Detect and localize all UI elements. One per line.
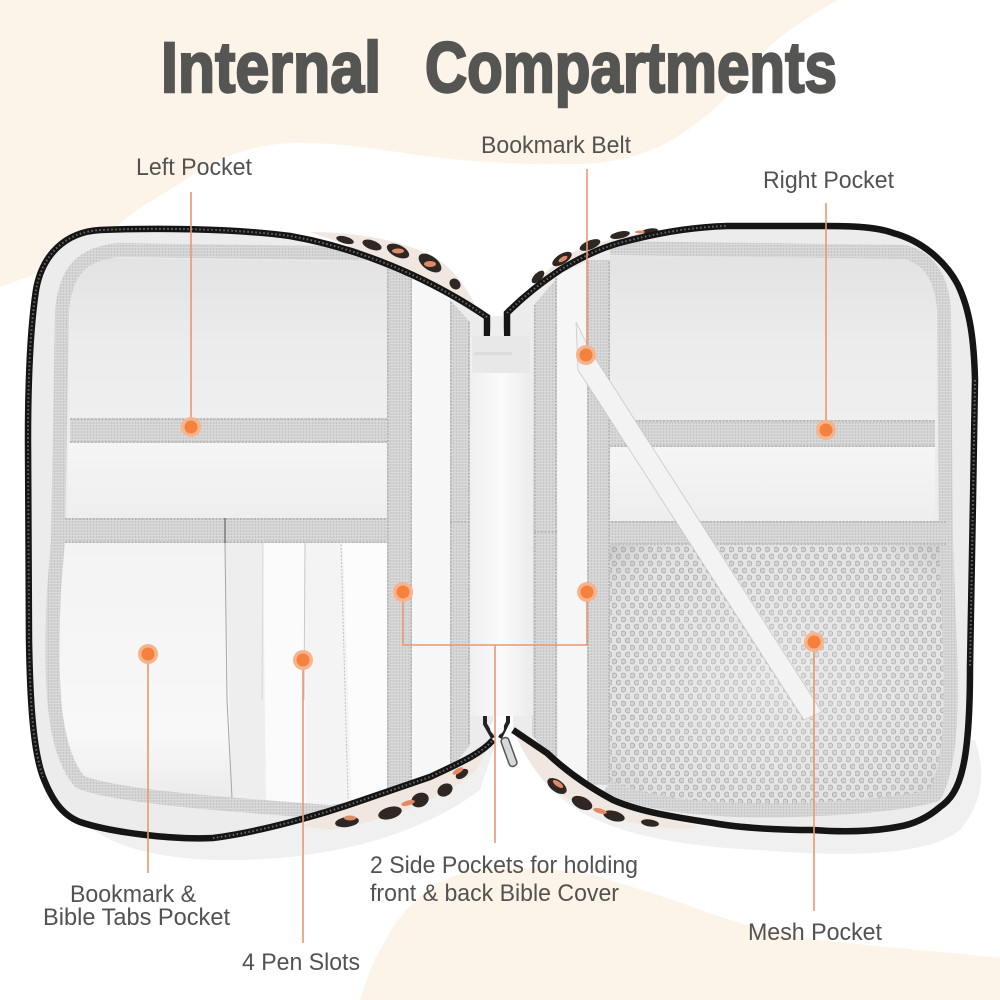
inner rim, left (450, 300, 470, 770)
callout: bookmark and bible tabs pocket (43, 644, 230, 931)
middle fabric, right (610, 447, 935, 522)
zipper, left (28, 229, 493, 838)
leopard fabric band, left bottom (300, 745, 490, 830)
zipper, right (507, 226, 975, 831)
callout: pen slots: 4 Pen Slots (242, 949, 360, 976)
callout: side pockets (370, 582, 638, 907)
leopard fabric band, right top (524, 227, 685, 298)
callout: side pockets: 2 Side Pockets for holding (370, 852, 638, 879)
title: Compartments (425, 29, 837, 108)
callout: mesh pocket (748, 632, 882, 946)
strap, right pocket (607, 420, 935, 447)
rim webbing, left (52, 250, 440, 812)
vertical strap, left (387, 265, 412, 790)
strap, lower pockets (65, 518, 388, 543)
strap, mesh pocket (608, 521, 946, 545)
side pocket, right (557, 262, 587, 782)
lining (503, 226, 975, 831)
callout: side pockets: front & back Bible Cover (370, 880, 619, 907)
bottom zipper pull (485, 716, 518, 767)
title: Internal (161, 29, 381, 108)
left panel of case (28, 229, 495, 840)
leopard fabric band, left top (310, 232, 478, 312)
vertical strap, right (587, 260, 610, 785)
callout: left pocket: Left Pocket (136, 154, 252, 181)
top zipper head (490, 316, 504, 336)
callout: right pocket: Right Pocket (763, 167, 894, 194)
side pocket, left (412, 268, 450, 786)
callout: bookmark and bible tabs pocket: Bookmark & (70, 881, 196, 908)
right panel of case (503, 226, 975, 831)
inner rim, right (532, 278, 557, 765)
strap, left pocket (70, 418, 388, 443)
upper pocket, left (70, 258, 387, 418)
spine top patch (472, 336, 530, 373)
leopard fabric band, right bottom (515, 735, 700, 829)
callout: right pocket (763, 167, 894, 440)
lining (28, 229, 495, 840)
upper pocket, right (610, 256, 936, 420)
pen slots (225, 518, 387, 806)
case shadow (50, 740, 981, 860)
rim webbing, right (608, 248, 951, 810)
title (161, 29, 837, 108)
middle fabric, left (68, 443, 388, 519)
callout: bookmark and bible tabs pocket: Bible Tabs Pocket (43, 904, 230, 931)
callout: bookmark belt: Bookmark Belt (481, 132, 631, 159)
callout: left pocket (136, 154, 252, 437)
callout: mesh pocket: Mesh Pocket (748, 919, 882, 946)
center spine (470, 316, 533, 767)
mesh pocket (608, 545, 948, 808)
bookmark belt (576, 322, 822, 720)
callout: pen slots (242, 650, 360, 976)
lower fabric: bookmark pocket (50, 543, 232, 800)
callout: bookmark belt (481, 132, 631, 365)
